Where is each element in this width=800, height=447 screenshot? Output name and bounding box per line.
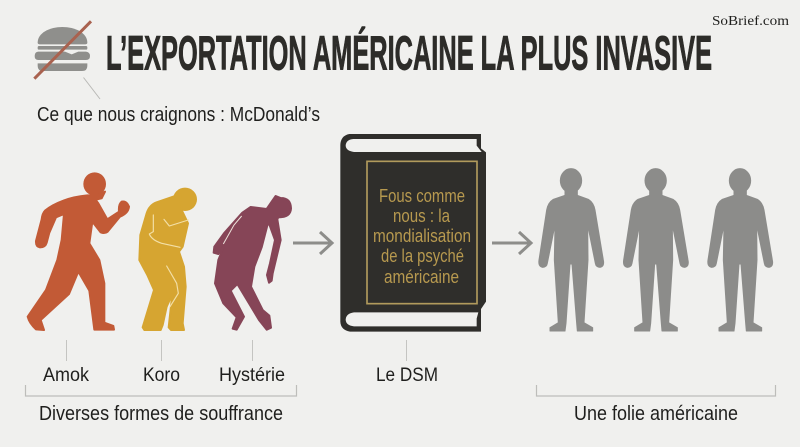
bracket: left group: [26, 385, 296, 396]
label: Une folie américaine: Une folie américaine: [574, 403, 738, 425]
figure: Koro: [139, 188, 197, 330]
logo: SoBrief.com: SoBrief.com: [712, 13, 790, 28]
caption: McDonald's: Ce que nous craignons : McDonald’s: [37, 104, 320, 126]
label: Diverses formes de souffrance: Diverses formes de souffrance: [39, 403, 283, 425]
arrow: symptoms to DSM: [293, 232, 332, 254]
figures: three grey silhouettes: [539, 169, 773, 331]
book title: nous : la: [393, 206, 451, 226]
label: Hystérie: Hystérie: [219, 365, 285, 386]
callout line: burger to caption: [84, 78, 100, 99]
Koro arm highlights: [149, 215, 188, 307]
book title: américaine: [384, 267, 459, 287]
grey figure 1: [539, 169, 604, 331]
book title: Fous comme: [379, 186, 465, 206]
book: Fous comme nous: [340, 134, 486, 332]
tick lines: [66, 340, 406, 361]
label: Amok: Amok: [43, 365, 89, 386]
figure: Hystérie: [214, 196, 291, 330]
figure: Amok: [28, 172, 129, 330]
grey figure 2: [623, 169, 688, 331]
book title: [373, 186, 471, 287]
label: Le DSM: Le DSM: [376, 365, 438, 386]
book title: de la psyché: [381, 246, 464, 266]
label: Koro: Koro: [143, 365, 180, 386]
arrow: DSM to American madness: [492, 232, 531, 254]
book title: mondialisation: [373, 226, 471, 246]
bracket: right group: [536, 385, 776, 396]
icon: crossed-out burger: [34, 21, 91, 79]
Hystérie arm highlight: [223, 216, 242, 244]
grey figure 3: [708, 169, 773, 331]
